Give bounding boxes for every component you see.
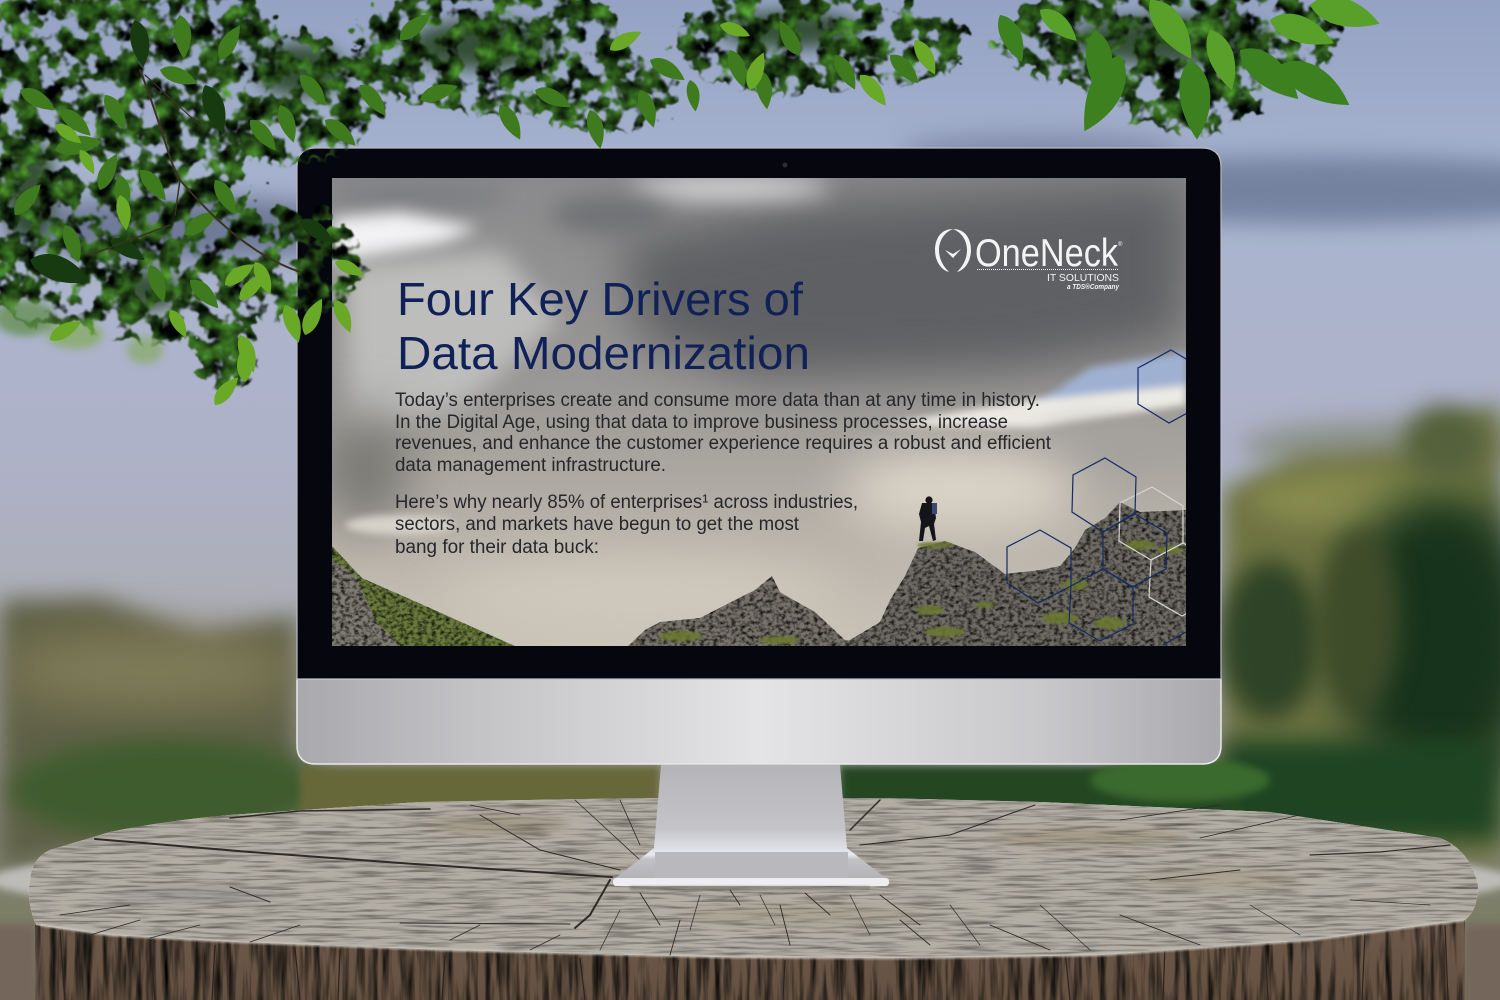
logo: OneNeck: ® xyxy=(1118,241,1123,248)
screen: slide xyxy=(320,178,1215,646)
intro paragraph: In the Digital Age, using that data to improve business processes, increase xyxy=(395,412,1008,433)
stump rim highlight xyxy=(40,920,1465,958)
heading: Four Key Drivers of xyxy=(397,273,803,325)
soft out of focus greens xyxy=(0,300,163,364)
logo mark xyxy=(935,229,971,272)
hexagons xyxy=(1006,349,1186,646)
stump side cracks xyxy=(60,925,1448,1000)
second paragraph: bang for their data buck: xyxy=(395,537,599,558)
leafy masses xyxy=(0,0,1340,395)
tree stump xyxy=(0,798,1500,1000)
intro paragraph xyxy=(395,390,1052,476)
right leaves xyxy=(992,0,1384,141)
heading: Data Modernization xyxy=(397,327,810,379)
monitor xyxy=(297,148,1221,890)
stump stains xyxy=(430,815,570,835)
logo: OneNeck: IT SOLUTIONS xyxy=(1047,272,1119,284)
logo: OneNeck: a TDS®Company xyxy=(1067,283,1120,291)
stump side xyxy=(35,900,1465,1000)
stump blurred edge xyxy=(0,836,1500,924)
monitor chin xyxy=(297,679,1221,764)
stump top xyxy=(29,798,1478,958)
monitor bezel xyxy=(297,148,1221,679)
intro paragraph: data management infrastructure. xyxy=(395,455,666,476)
second paragraph: Here’s why nearly 85% of enterprises¹ across industries, xyxy=(395,492,858,513)
solid dark core xyxy=(5,12,1270,310)
stump cracks xyxy=(60,800,1450,955)
intro paragraph: Today’s enterprises create and consume more data than at any time in history. xyxy=(395,390,1040,411)
heading xyxy=(397,273,810,379)
second paragraph xyxy=(395,492,858,558)
mountains xyxy=(332,502,1186,646)
logo: OneNeck: OneNeck xyxy=(975,232,1118,275)
monitor stand xyxy=(613,765,889,890)
left leaves xyxy=(8,14,367,409)
foliage: top canopy xyxy=(0,0,1384,409)
hiker xyxy=(919,496,937,541)
slide sky and clouds xyxy=(320,178,1186,646)
second paragraph: sectors, and markets have begun to get the most xyxy=(395,514,800,535)
logo: OneNeck xyxy=(935,229,1123,291)
camera xyxy=(782,162,788,168)
intro paragraph: revenues, and enhance the customer experience requires a robust and efficient xyxy=(395,433,1052,454)
branch xyxy=(90,70,300,272)
middle leaves xyxy=(355,8,942,150)
